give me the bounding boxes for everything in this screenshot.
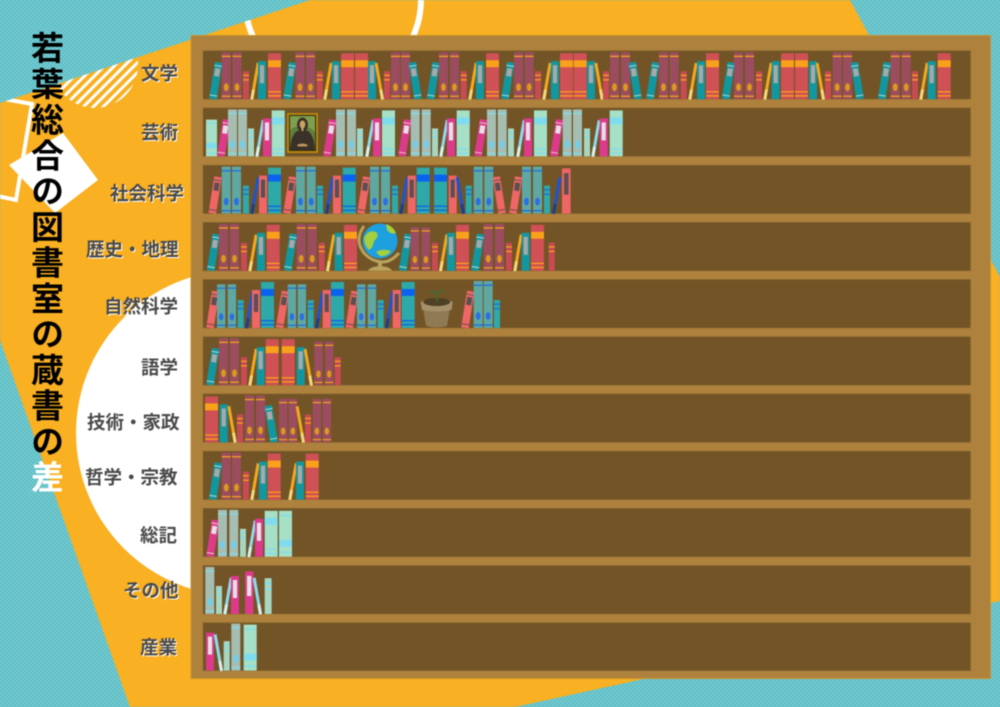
background: striped semicircle — [56, 58, 139, 109]
shelf row 7: 技術・家政 books — [205, 395, 331, 443]
label: 産業: 産業 — [140, 637, 177, 658]
label: 総記: 総記 — [140, 525, 177, 546]
shelf row 10: その他 books — [205, 567, 272, 615]
shelf row 9: 総記 books — [206, 510, 292, 557]
label: 哲学・宗教: 哲学・宗教 — [85, 467, 178, 488]
label: その他: その他 — [123, 580, 179, 601]
label: 芸術: 芸術 — [141, 122, 178, 143]
label: 語学: 語学 — [141, 357, 178, 378]
shelf row 2: 芸術 books — [206, 109, 623, 157]
icon: Mona Lisa painting — [287, 113, 318, 153]
shelf row 5: 自然科学 books — [206, 281, 500, 329]
title: vertical heading: 若葉総合の図書室の蔵書の 差 — [26, 31, 64, 496]
background: white ring arc — [244, 0, 425, 36]
icon: globe — [359, 224, 399, 271]
shelf row 1: 文学 books — [209, 52, 951, 100]
background: white outlined square — [0, 96, 32, 200]
label: 自然科学: 自然科学 — [104, 296, 178, 317]
shelf row 6: 語学 books — [206, 338, 341, 386]
icon: potted sprout — [421, 290, 453, 328]
shelf row 3: 社会科学 books — [208, 167, 571, 214]
background: large white circle — [76, 270, 402, 596]
shelf row 11: 産業 books — [206, 624, 257, 671]
label: 文学: 文学 — [141, 63, 178, 84]
shelf row 4: 歴史・地理 books — [207, 224, 555, 271]
label: 社会科学: 社会科学 — [110, 183, 184, 204]
shelf row 8: 哲学・宗教 books — [209, 453, 319, 500]
bookshelf frame — [191, 36, 990, 678]
label: 歴史・地理: 歴史・地理 — [86, 239, 179, 260]
background: white diamond — [9, 133, 98, 213]
label: 技術・家政: 技術・家政 — [87, 412, 180, 433]
